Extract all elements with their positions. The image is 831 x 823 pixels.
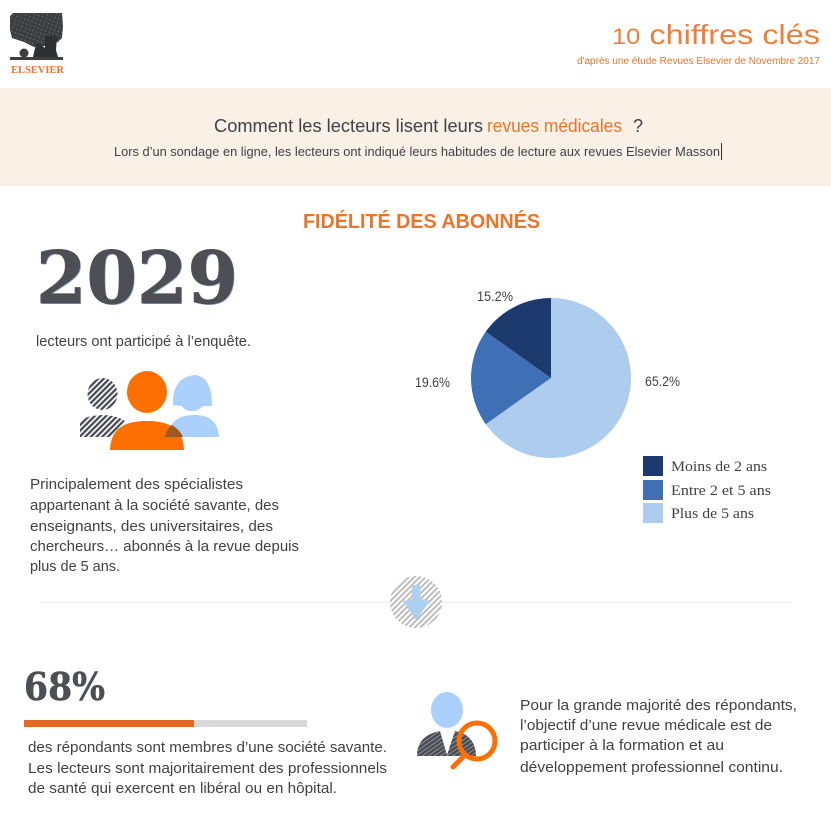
legend: Entre 2 et 5 ans [671, 483, 771, 499]
progress bar: 68% [24, 720, 307, 727]
legend: Moins de 2 ans [671, 459, 767, 475]
stat: 68%: 68% [24, 664, 105, 709]
pie labels [415, 289, 680, 390]
slice: more than 5 years [486, 298, 631, 458]
question heading: ? [633, 116, 643, 136]
pie chart: subscription length [415, 289, 771, 523]
text: society members: Les lecteurs sont majoritairement des professionnels [28, 760, 387, 777]
question heading: Comment les lecteurs lisent leurs [214, 116, 483, 136]
legend [643, 456, 771, 523]
pie labels: 65.2% [645, 374, 680, 389]
text: readers profile: chercheurs… abonnés à la revue depuis [30, 538, 299, 555]
text: readers profile: plus de 5 ans. [30, 558, 120, 575]
text: journal objective: développement professionnel continu. [520, 759, 783, 776]
text: participants: lecteurs ont participé à l’enquête. [36, 333, 251, 350]
icon: person with magnifying glass [417, 692, 495, 767]
text: journal objective [520, 697, 797, 776]
subtitle: d'après une étude Revues Elsevier de Novembre 2017 [577, 56, 820, 67]
intro text: Lors d’un sondage en ligne, les lecteurs ont indiqué leurs habitudes de lecture aux revues Elsevier Masson [114, 144, 720, 159]
text: journal objective: participer à la formation et au [520, 737, 724, 754]
text: journal objective: l’objectif d’une revue médicale est de [520, 717, 772, 734]
icon: group of readers [80, 371, 219, 450]
slice: 2 to 5 years [471, 332, 551, 424]
legend: Plus de 5 ans [671, 506, 754, 522]
logo: Elsevier tree: ELSEVIER [11, 64, 65, 76]
big number: 2029: 2029 [36, 235, 238, 320]
logo: Elsevier tree [10, 13, 65, 76]
question heading: revues médicales [487, 116, 622, 136]
header: logo and title [10, 13, 820, 76]
pie labels: 19.6% [415, 375, 450, 390]
title: 10 chiffres clés [612, 19, 820, 50]
text: readers profile: Principalement des spécialistes [30, 476, 243, 493]
slice: under 2 years [486, 298, 551, 378]
text: society members [28, 739, 387, 797]
panel: introduction band [0, 88, 831, 186]
pie labels: 15.2% [477, 289, 513, 304]
text: readers profile: enseignants, des universitaires, des [30, 518, 273, 535]
text: society members: des répondants sont membres d’une société savante. [28, 739, 387, 756]
big number: 2029: 2029 [37, 236, 239, 321]
text: society members: de santé qui exercent en libéral ou en hôpital. [28, 780, 337, 797]
icon: down arrow in hatched circle [390, 576, 442, 628]
section heading: FIDÉLITÉ DES ABONNÉS [303, 210, 540, 233]
text: readers profile: appartenant à la société savante, des [30, 497, 279, 514]
text: journal objective: Pour la grande majorité des répondants, [520, 697, 797, 714]
text: readers profile [30, 476, 299, 575]
question heading [214, 116, 643, 136]
